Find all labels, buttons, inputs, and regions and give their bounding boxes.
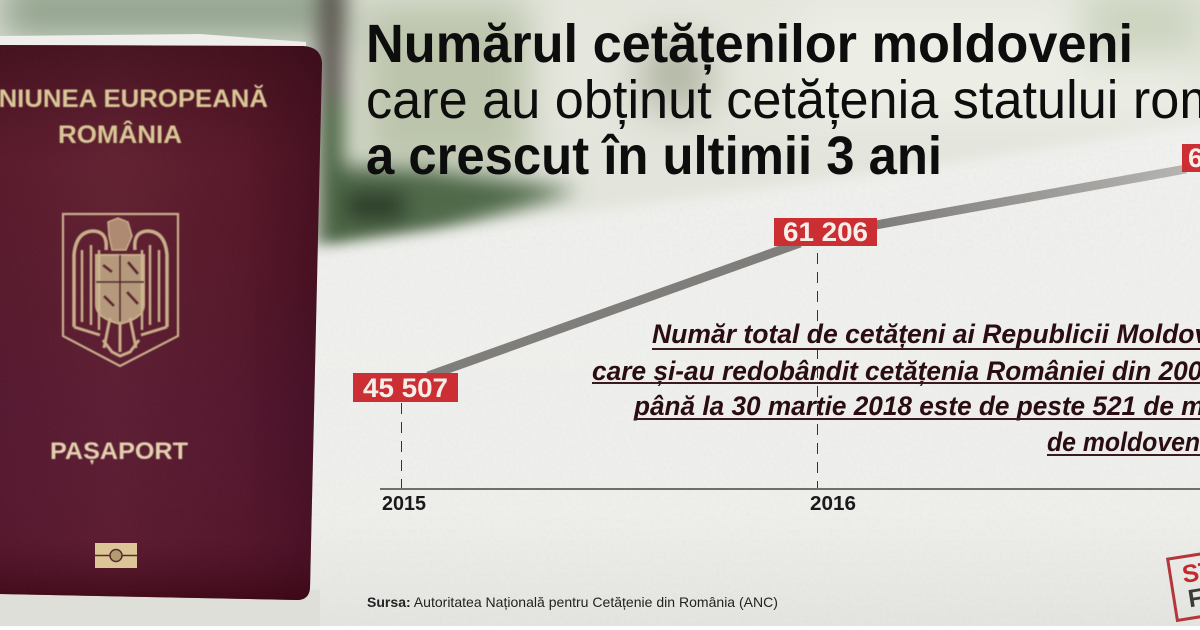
background photo: blurred foliage <box>0 0 1200 270</box>
year 2016: 2016 <box>810 493 856 515</box>
axis <box>380 488 1200 490</box>
title: a crescut în ultimii 3 ani <box>366 126 942 186</box>
drop line 2016 <box>816 253 818 488</box>
data label 2017 (cropped) <box>1182 143 1200 173</box>
trend line 2015-2016 <box>428 243 800 376</box>
callout text <box>592 319 1200 457</box>
passport cover <box>0 40 325 605</box>
passport heading: ROMÂNIA <box>58 119 182 149</box>
title: Numărul cetățenilor moldoveni <box>366 14 1133 75</box>
trend line 2016-2017 <box>870 169 1186 226</box>
passport label: PAȘAPORT <box>50 438 188 465</box>
line chart <box>353 143 1200 515</box>
icon: coat of arms <box>63 214 178 366</box>
stamp logo (cropped) <box>1168 550 1200 620</box>
drop line 2015 <box>400 403 402 488</box>
data label 2016: 61 206 <box>783 217 868 247</box>
icon: biometric chip <box>95 543 137 568</box>
year 2015: 2015 <box>382 493 426 515</box>
passport <box>0 34 325 605</box>
passport heading <box>0 84 268 149</box>
data label 2015: 45 507 <box>363 373 448 403</box>
title <box>366 14 1200 186</box>
passport pages <box>0 34 306 50</box>
source note: Sursa: Autoritatea Națională pentru Cetățenie din România (ANC) <box>367 594 778 610</box>
